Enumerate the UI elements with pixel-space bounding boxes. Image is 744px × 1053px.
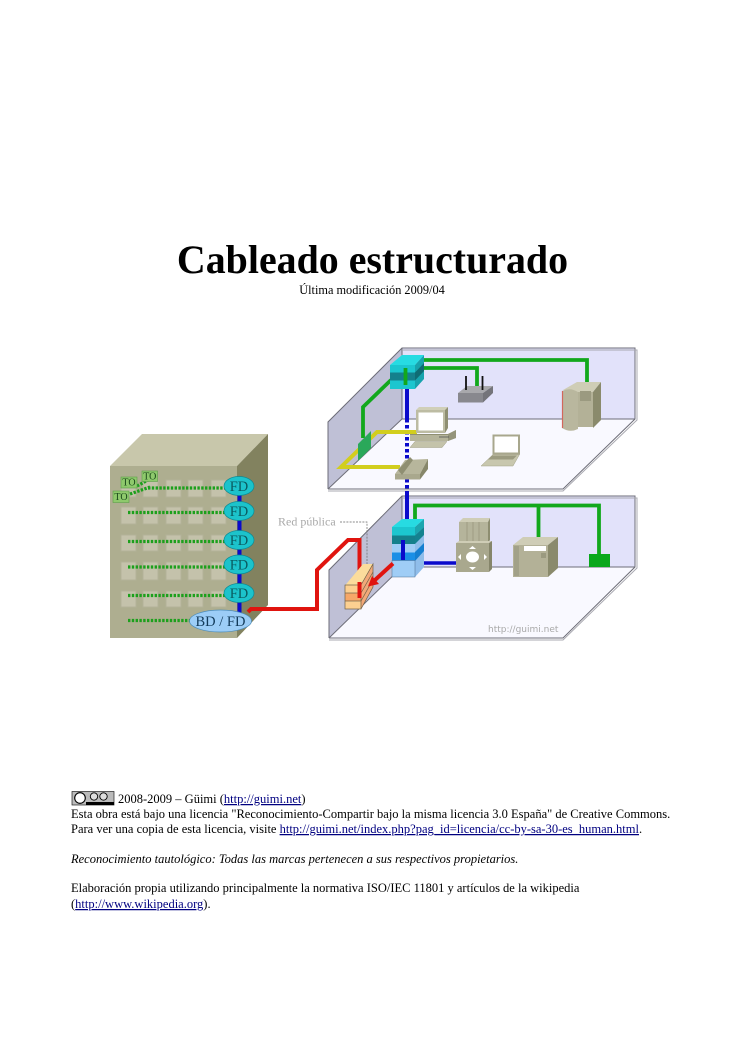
blue cable to PBX xyxy=(422,561,458,565)
green outlet block xyxy=(589,554,610,567)
floor distributors xyxy=(190,476,254,632)
diagram: upper floor room xyxy=(328,348,637,491)
green cables, upper floor xyxy=(363,360,587,438)
sources note: Elaboración propia utilizando principalmente la normativa ISO/IEC 11801 y artículos de la wikipedia xyxy=(71,881,580,895)
red arrow from rack to firewall xyxy=(368,564,393,586)
wall outlet xyxy=(358,431,371,461)
title: Cableado estructurado xyxy=(177,237,568,282)
green cables, lower floor xyxy=(415,506,599,555)
telecommunication outlets: TO xyxy=(122,478,136,488)
telecommunication outlets: TO xyxy=(114,492,128,503)
building distributor rack xyxy=(392,519,424,577)
icon: PBX telephone exchange xyxy=(456,518,492,572)
floor distributors: FD xyxy=(230,586,248,602)
icon: creative commons badge xyxy=(72,792,114,805)
icon: firewall xyxy=(345,564,373,609)
yellow cables xyxy=(341,432,417,467)
backbone cable, upper floor xyxy=(405,389,409,419)
label: red publica: Red pública xyxy=(278,514,336,528)
floor distributors: FD xyxy=(230,479,248,495)
licence link line: Para ver una copia de esta licencia, visite http://guimi.net/index.php?pag_id=licencia/cc-by-sa-30-es_human.html. xyxy=(71,822,642,836)
label: red publica xyxy=(278,514,367,565)
diagram: lower floor room xyxy=(248,491,637,640)
floor distributors: FD xyxy=(230,558,248,574)
horizontal cabling xyxy=(128,479,226,620)
floor distributors: FD xyxy=(230,533,248,549)
copyright line: 2008-2009 – Güimi (http://guimi.net) xyxy=(118,792,306,806)
telecommunication outlets xyxy=(113,471,158,503)
building backbone cable xyxy=(238,486,242,620)
icon: server xyxy=(562,382,601,431)
floor distributors: BD / FD xyxy=(196,614,245,630)
trademark note: Reconocimiento tautológico: Todas las marcas pertenecen a sus respectivos propietarios. xyxy=(70,852,518,866)
icon: wireless router xyxy=(458,376,493,402)
telecommunication outlets: TO xyxy=(143,472,156,482)
red public network cable xyxy=(248,540,360,612)
subtitle: Última modificación 2009/04 xyxy=(299,283,445,297)
sources link: (http://www.wikipedia.org). xyxy=(71,897,211,911)
icon: telephone xyxy=(395,457,428,480)
floor distributor rack, upper xyxy=(390,355,424,389)
licence block xyxy=(70,792,670,911)
icon: grey equipment box xyxy=(513,537,558,577)
backbone cable, lower floor xyxy=(405,491,409,522)
diagram: building xyxy=(110,434,268,638)
icon: laptop xyxy=(481,434,520,466)
watermark url: http://guimi.net xyxy=(488,625,559,635)
floor distributors: FD xyxy=(230,504,248,520)
licence text line: Esta obra está bajo una licencia "Reconocimiento-Compartir bajo la misma licencia 3.0 España" de Creative Commons. xyxy=(71,807,670,821)
icon: desktop computer xyxy=(410,407,456,448)
